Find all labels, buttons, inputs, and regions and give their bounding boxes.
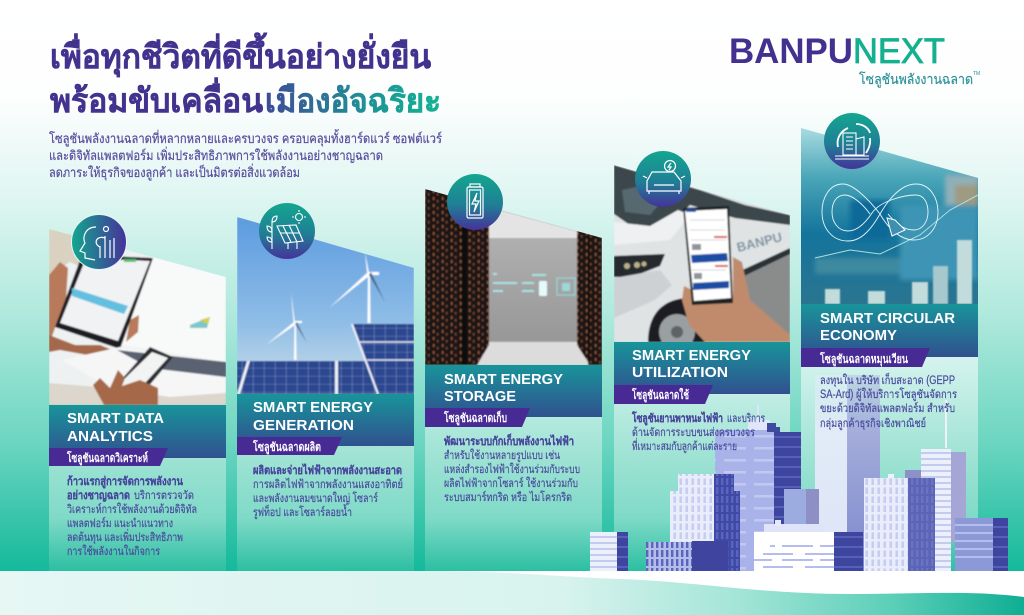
- body text: smart data analytics: บริการตรวจวัด: [134, 489, 194, 502]
- body text: smart energy storage: [444, 433, 580, 504]
- header: smart circular economy: ECONOMY: [820, 327, 897, 344]
- city skyline: [590, 375, 1008, 571]
- header: smart data analytics: SMART DATA: [67, 410, 164, 427]
- body text: smart circular economy: กลุ่มลูกค้าธุรกิจเชิงพาณิชย์: [820, 416, 926, 430]
- bottom wave band: [0, 571, 1024, 615]
- icon: data analytics: [72, 214, 126, 270]
- title: พร้อมขับเคลื่อน: [50, 77, 263, 119]
- photo: circular economy infinity loop: [801, 128, 978, 304]
- title: เมืองอัจฉริยะ: [265, 82, 441, 119]
- body text: smart circular economy: ลงทุนใน บริษัท เก็บสะอาด (GEPP: [820, 372, 955, 387]
- header: smart energy utilization: UTILIZATION: [632, 364, 728, 381]
- title: [50, 32, 441, 119]
- body text: smart energy utilization: [631, 410, 765, 453]
- header: smart energy storage: [425, 365, 602, 417]
- body text: smart energy storage: ระบบสมาร์ทกริด หรือ ไมโครกริด: [444, 490, 572, 504]
- tag: smart energy generation: โซลูชันฉลาดผลิต: [252, 439, 321, 455]
- header: smart circular economy: SMART CIRCULAR: [820, 310, 955, 327]
- body text: smart data analytics: อย่างชาญฉลาด: [67, 489, 130, 502]
- body text: smart energy storage: สำหรับใช้งานหลายรูปแบบ เช่น: [444, 449, 560, 462]
- body text: smart data analytics: แพลตฟอร์ม แนะนำแนวทาง: [67, 516, 173, 530]
- body text: smart energy utilization: ด้านจัดการระบบขนส่งครบวงจร: [632, 426, 755, 439]
- title: เพื่อทุกชีวิตที่ดีขึ้นอย่างยั่งยืน: [50, 32, 431, 78]
- intro text: โซลูชันพลังงานฉลาดที่หลากหลายและครบวงจร ครอบคลุมทั้งฮาร์ดแวร์ ซอฟต์แวร์: [49, 129, 442, 147]
- icon: circular city: [824, 113, 880, 169]
- body text: smart energy utilization: และบริการ: [727, 412, 765, 425]
- icon: battery: [447, 174, 503, 230]
- tag: smart circular economy: [801, 348, 930, 367]
- header: smart circular economy: [801, 304, 978, 357]
- header: smart energy utilization: SMART ENERGY: [632, 347, 751, 364]
- header: smart data analytics: [49, 405, 226, 458]
- body text: smart data analytics: วิเคราะห์การใช้พลังงานด้วยดิจิทัล: [67, 502, 197, 516]
- intro text: [49, 129, 442, 181]
- logo: โซลูชันพลังงานฉลาด: [859, 71, 973, 88]
- tag: smart energy utilization: โซลูชันฉลาดใช้: [631, 387, 689, 403]
- photo: electric car and phone app: BANPU: [735, 229, 784, 255]
- intro text: และดิจิทัลแพลตฟอร์ม เพิ่มประสิทธิภาพการใช้พลังงานอย่างชาญฉลาด: [49, 147, 383, 163]
- photo: tablet and phone: [49, 225, 226, 405]
- panel: smart energy generation: [237, 217, 414, 571]
- logo: NEXT: [853, 32, 945, 71]
- body text: smart data analytics: [67, 475, 197, 558]
- icon: solar panel and plants: [259, 203, 315, 259]
- logo: TM: [973, 71, 980, 77]
- body text: smart energy generation: การผลิตไฟฟ้าจากพลังงานแสงอาทิตย์: [253, 477, 403, 491]
- photo: battery storage room: [425, 189, 602, 365]
- body text: smart circular economy: [820, 372, 957, 430]
- body text: smart energy utilization: โซลูชันยานพาหนะไฟฟ้า: [631, 410, 723, 426]
- header: smart energy generation: SMART ENERGY: [253, 399, 373, 416]
- tag: smart circular economy: โซลูชันฉลาดหมุนเวียน: [819, 351, 909, 367]
- header: smart energy generation: [237, 394, 414, 446]
- icon: electric car: [635, 151, 691, 207]
- intro text: ลดภาระให้ธุรกิจของลูกค้า และเป็นมิตรต่อสิ่งแวดล้อม: [49, 163, 300, 181]
- tag: smart energy storage: [425, 408, 530, 427]
- photo: wind turbines and solar panels: [237, 217, 414, 394]
- body text: smart data analytics: ก้าวแรกสู่การจัดการพลังงาน: [67, 475, 183, 489]
- photo: electric car and phone app: [614, 165, 790, 350]
- header: smart data analytics: ANALYTICS: [67, 428, 153, 445]
- logo: BANPU: [729, 32, 853, 71]
- body text: smart data analytics: ลดต้นทุน และเพิ่มประสิทธิภาพ: [67, 529, 183, 544]
- body text: smart energy generation: ผลิตและจ่ายไฟฟ้าจากพลังงานสะอาด: [253, 463, 402, 477]
- body text: smart energy storage: พัฒนาระบบกักเก็บพลังงานไฟฟ้า: [444, 433, 574, 448]
- header: smart energy storage: STORAGE: [444, 388, 516, 405]
- tag: smart energy storage: โซลูชันฉลาดเก็บ: [443, 410, 507, 426]
- logo: [729, 32, 980, 88]
- panel: smart data analytics: [49, 225, 226, 571]
- tag: smart energy utilization: [614, 385, 713, 404]
- header: smart energy utilization: [614, 342, 790, 394]
- body text: smart energy storage: แหล่งสำรองไฟฟ้าใช้งานร่วมกับระบบ: [444, 463, 580, 476]
- body text: smart energy storage: ผลิตไฟฟ้าจากโซลาร์ ใช้งานร่วมกับ: [444, 476, 578, 490]
- panel: smart circular economy: [801, 128, 978, 571]
- tag: smart energy generation: [237, 437, 342, 455]
- body text: smart circular economy: SA-Ard) ผู้ให้บริการโซลูชันจัดการ: [820, 387, 957, 401]
- panel: smart energy storage: [425, 189, 602, 571]
- header: smart energy generation: GENERATION: [253, 417, 354, 434]
- body text: smart circular economy: ขยะด้วยดิจิทัลแพลตฟอร์ม สำหรับ: [820, 401, 955, 415]
- body text: smart data analytics: การใช้พลังงานในกิจการ: [67, 545, 160, 558]
- body text: smart energy generation: รูฟท็อป และโซลาร์ลอยน้ำ: [253, 504, 352, 519]
- body text: smart energy generation: และพลังงานลมขนาดใหญ่ โซลาร์: [253, 491, 378, 505]
- body text: smart energy generation: [253, 463, 403, 519]
- body text: smart energy utilization: ที่เหมาะสมกับลูกค้าแต่ละราย: [632, 438, 737, 453]
- tag: smart data analytics: โซลูชันฉลาดวิเคราะห์: [66, 450, 148, 466]
- panel: smart energy utilization: [614, 165, 790, 571]
- tag: smart data analytics: [49, 448, 168, 466]
- header: smart energy storage: SMART ENERGY: [444, 371, 563, 388]
